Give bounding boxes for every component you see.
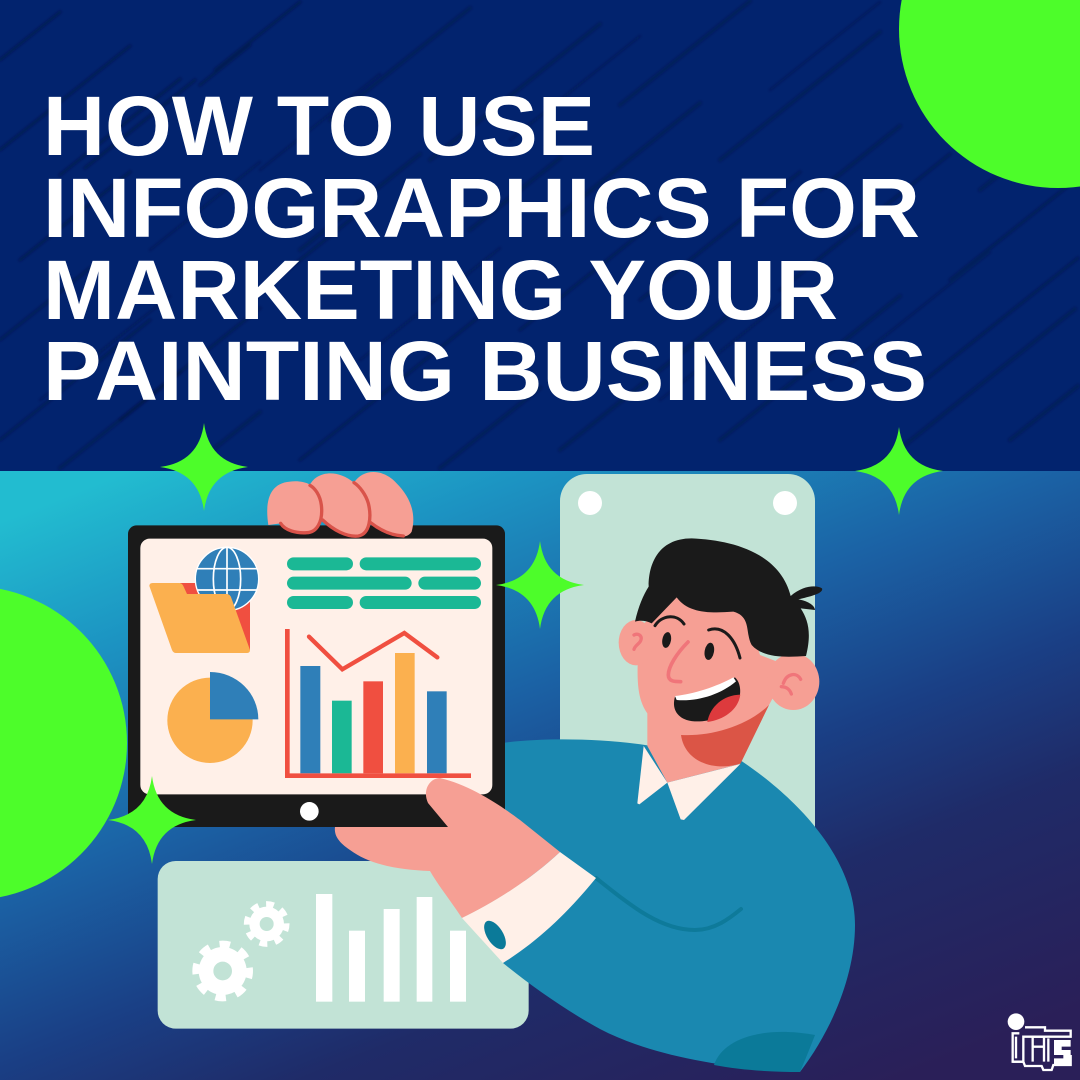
icon: globe — [173, 547, 259, 650]
shirt cuff — [462, 852, 596, 963]
sparkle: beside tablet — [496, 541, 584, 629]
cuff button — [480, 917, 510, 953]
hand — [335, 778, 560, 918]
bar chart — [287, 629, 471, 776]
icon: large gear — [194, 942, 252, 1000]
mouth — [674, 677, 740, 722]
icon: folder — [149, 583, 250, 653]
man: sweater shadow and crease — [596, 878, 815, 1072]
shirt collar — [637, 746, 740, 820]
fingers gripping tablet — [267, 472, 413, 537]
neck shadow — [681, 705, 769, 766]
sparkle: tablet lower left — [108, 776, 196, 864]
back panel: mint card behind man — [560, 474, 815, 854]
green text lines — [287, 557, 481, 609]
tablet screen — [140, 539, 492, 794]
title — [43, 79, 927, 418]
man: sweater — [490, 739, 855, 1072]
bar chart: white bars — [316, 894, 466, 1002]
top banner background — [0, 0, 1080, 471]
sparkle: top right — [855, 427, 943, 515]
decorative circle: top right — [899, 0, 1080, 188]
left ear — [619, 620, 653, 665]
panel: gears and bars card — [158, 861, 529, 1029]
sparkle: top left — [160, 423, 248, 511]
home button — [300, 802, 319, 821]
neck and face — [638, 597, 790, 783]
decorative circle: left — [0, 586, 127, 900]
title: MARKETING YOUR — [43, 243, 838, 337]
logo — [1008, 1013, 1071, 1070]
eyebrows and eyes — [655, 617, 740, 661]
tablet — [128, 472, 505, 827]
pie chart — [167, 672, 258, 763]
man: head — [619, 538, 822, 820]
title: INFOGRAPHICS FOR — [43, 161, 920, 255]
hair — [635, 538, 822, 657]
title: PAINTING BUSINESS — [43, 324, 927, 418]
right ear — [767, 653, 819, 710]
title: HOW TO USE — [43, 79, 595, 173]
tablet body — [128, 525, 505, 827]
man: hand and cuff — [335, 778, 596, 963]
icon: small gear — [247, 904, 287, 944]
nose — [668, 642, 688, 682]
lower gradient background — [0, 471, 1080, 1080]
